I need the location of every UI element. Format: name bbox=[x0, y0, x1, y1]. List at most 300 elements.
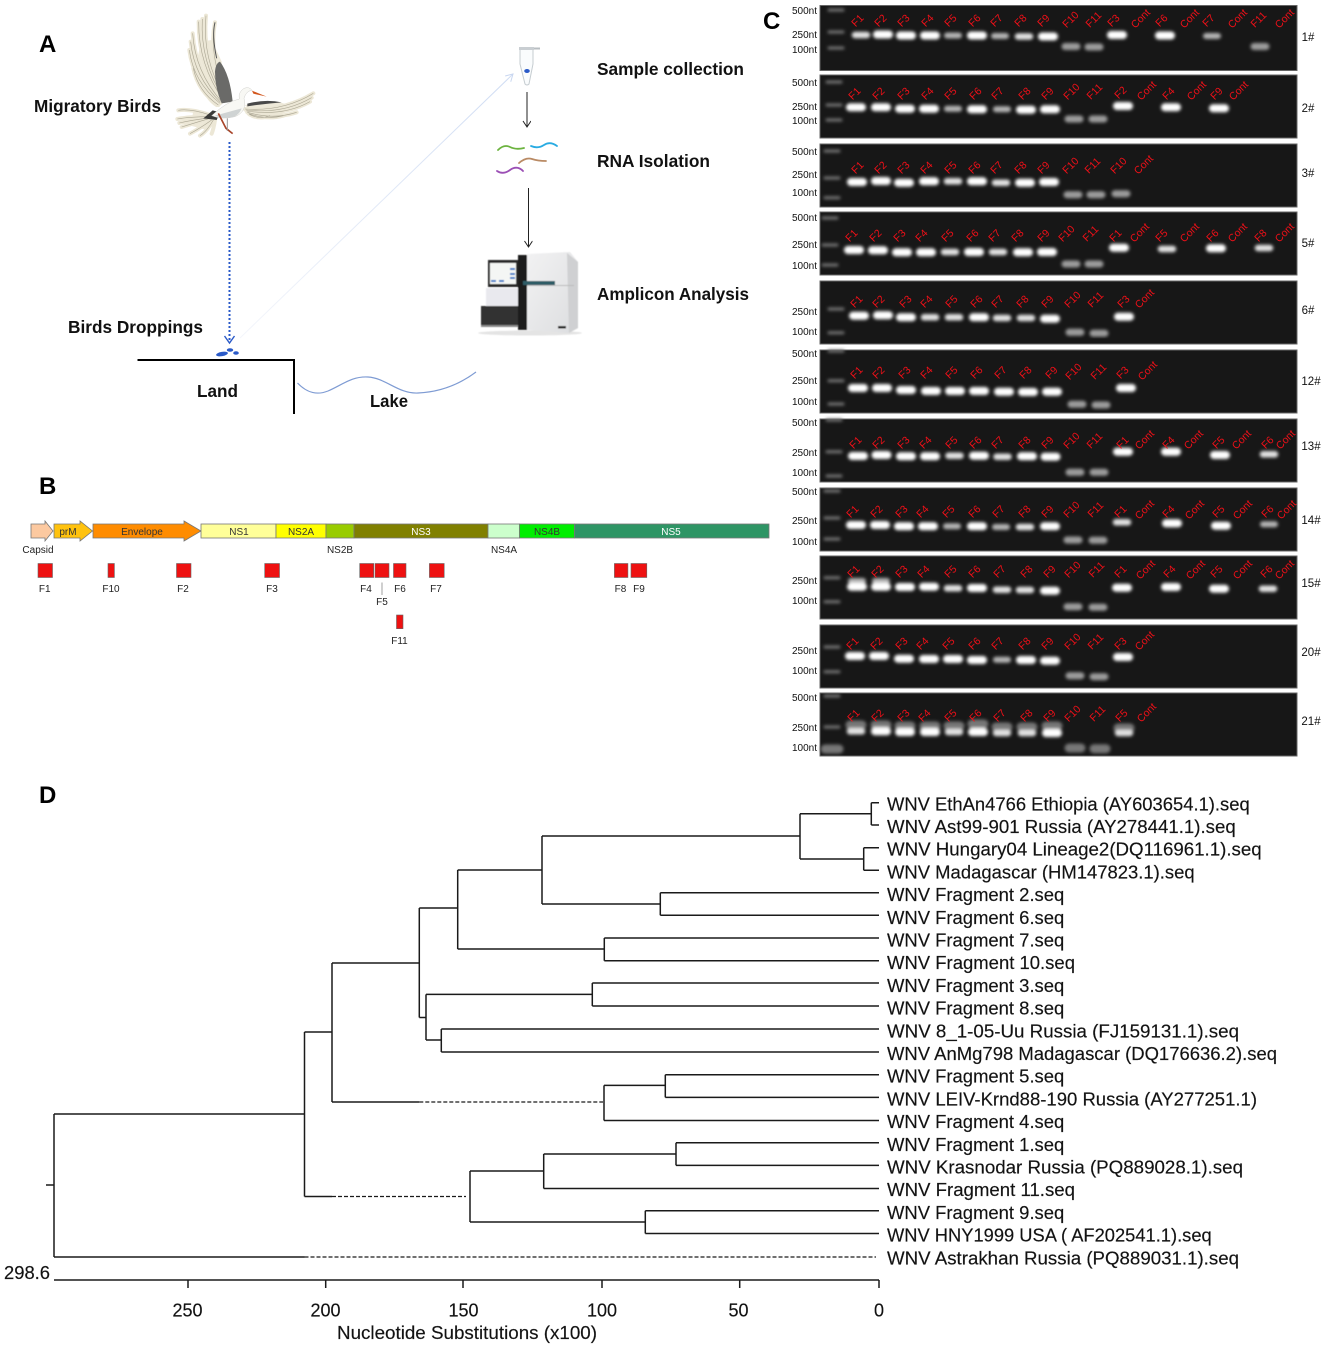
gel 6#: 6# bbox=[1302, 305, 1315, 317]
tip labels: WNV Fragment 5.seq bbox=[887, 1067, 1064, 1087]
gel 3#: F10 bbox=[1060, 155, 1082, 177]
gel 20#: 20# bbox=[1301, 647, 1321, 659]
gel 2#: F2 bbox=[1112, 84, 1130, 101]
gel 5#: F6 bbox=[964, 227, 982, 244]
tip labels: WNV Ast99-901 Russia (AY278441.1).seq bbox=[887, 817, 1236, 837]
tip labels: WNV Fragment 4.seq bbox=[887, 1112, 1064, 1132]
gel 21#: 250nt bbox=[792, 723, 817, 734]
icon: flying bird bbox=[177, 16, 313, 136]
gel 2#: F4 bbox=[919, 85, 937, 102]
gel 3#: F4 bbox=[918, 159, 936, 176]
gel 20#: F1 bbox=[844, 635, 862, 652]
gel 5#: F8 bbox=[1252, 227, 1270, 244]
gel 6#: F1 bbox=[848, 293, 866, 310]
gel 15#: F5 bbox=[1208, 563, 1226, 580]
gel 13#: 100nt bbox=[792, 468, 817, 479]
panel: C gel images bbox=[763, 6, 1321, 756]
gel 1#: F7 bbox=[988, 12, 1006, 29]
gel 14#: 500nt bbox=[792, 487, 817, 498]
gel 3#: 500nt bbox=[792, 147, 817, 158]
gel 6#: F11 bbox=[1086, 289, 1106, 310]
gel 15#: F10 bbox=[1062, 559, 1084, 581]
gel 12#: Cont bbox=[1136, 359, 1160, 383]
gel 5#: 250nt bbox=[792, 240, 817, 251]
gel 12#: 12# bbox=[1301, 376, 1321, 388]
gel 3#: F7 bbox=[988, 159, 1006, 176]
genome bar bbox=[31, 521, 769, 541]
gel 12#: 100nt bbox=[792, 397, 817, 408]
gel 15#: F4 bbox=[1161, 563, 1179, 580]
tip labels: WNV Fragment 6.seq bbox=[887, 908, 1064, 928]
gel 12#: F6 bbox=[968, 364, 986, 381]
gel 13#: 250nt bbox=[792, 448, 817, 459]
gel 15#: F3 bbox=[893, 563, 911, 580]
gel 13#: Cont bbox=[1274, 428, 1298, 452]
gel 21#: F10 bbox=[1062, 703, 1084, 725]
gel 20#: Cont bbox=[1133, 629, 1157, 653]
lake wave bbox=[298, 372, 476, 393]
icon: sample tube bbox=[519, 47, 540, 85]
gel 3#: F2 bbox=[872, 159, 890, 176]
gel 15#: 15# bbox=[1301, 578, 1321, 590]
tip labels: WNV Fragment 7.seq bbox=[887, 930, 1064, 950]
gel 1#: F9 bbox=[1035, 12, 1053, 29]
label: Lake: Lake bbox=[370, 391, 408, 411]
tip labels: WNV EthAn4766 Ethiopia (AY603654.1).seq bbox=[887, 794, 1250, 814]
fragment markers bbox=[38, 564, 647, 629]
gel 1#: 100nt bbox=[792, 45, 817, 56]
gel 15#: F6 bbox=[966, 563, 984, 580]
gel 12#: F7 bbox=[992, 364, 1010, 381]
gel 13#: 500nt bbox=[792, 418, 817, 429]
gel 12#: F2 bbox=[870, 364, 888, 381]
gel 21#: F3 bbox=[895, 707, 913, 724]
label: Migratory Birds: Migratory Birds bbox=[34, 96, 161, 116]
genome labels: NS2B bbox=[327, 545, 353, 556]
axis scale: 150 bbox=[448, 1300, 479, 1320]
label: Land: Land bbox=[197, 381, 238, 401]
genome labels: Capsid bbox=[22, 545, 54, 556]
gel 15#: F7 bbox=[991, 563, 1009, 580]
genome labels: NS5 bbox=[661, 527, 681, 538]
gel 15#: F4 bbox=[915, 563, 933, 580]
gel 5#: F3 bbox=[891, 227, 909, 244]
gel 3# bbox=[792, 144, 1315, 207]
gel 15#: Cont bbox=[1184, 558, 1208, 582]
gel 6#: F6 bbox=[968, 293, 986, 310]
gel 14#: Cont bbox=[1231, 498, 1255, 522]
gel 2#: F7 bbox=[989, 85, 1007, 102]
gel 3#: 250nt bbox=[792, 170, 817, 181]
gel 2#: F2 bbox=[870, 85, 888, 102]
gel 6#: F7 bbox=[989, 293, 1007, 310]
heading: C: C bbox=[763, 8, 780, 35]
gel 3#: F3 bbox=[895, 159, 913, 176]
gel 15#: F8 bbox=[1018, 563, 1036, 580]
gel 13#: F2 bbox=[870, 434, 888, 451]
gel 20#: F10 bbox=[1062, 631, 1084, 653]
gel 14#: 250nt bbox=[792, 516, 817, 527]
gel 3#: F10 bbox=[1108, 155, 1130, 177]
gel 1#: F2 bbox=[872, 12, 890, 29]
gel 6#: Cont bbox=[1133, 287, 1157, 311]
gel 13#: F1 bbox=[1114, 434, 1132, 451]
gel 5#: F10 bbox=[1056, 223, 1078, 245]
axis scale: 0 bbox=[874, 1300, 884, 1320]
gel 14#: 100nt bbox=[792, 537, 817, 548]
gel 1#: F11 bbox=[1249, 9, 1269, 30]
gel 20#: F5 bbox=[940, 635, 958, 652]
gel 13#: F3 bbox=[895, 434, 913, 451]
fragment labels: F3 bbox=[266, 584, 278, 595]
tip labels: WNV Hungary04 Lineage2(DQ116961.1).seq bbox=[887, 840, 1262, 860]
gel 13#: F11 bbox=[1085, 430, 1105, 451]
gel 1#: F3 bbox=[895, 12, 913, 29]
gel 15#: 100nt bbox=[792, 596, 817, 607]
gel 21#: F6 bbox=[967, 707, 985, 724]
gel 12#: F3 bbox=[1114, 364, 1132, 381]
panel: A sampling workflow bbox=[34, 16, 749, 414]
gel 21#: Cont bbox=[1135, 701, 1159, 725]
gel 3#: F9 bbox=[1035, 159, 1053, 176]
gel 2#: Cont bbox=[1227, 79, 1251, 103]
genome labels: NS2A bbox=[288, 527, 314, 538]
gel 14#: F9 bbox=[1039, 503, 1057, 520]
gel 3#: F6 bbox=[966, 159, 984, 176]
gel 2#: F10 bbox=[1061, 81, 1083, 103]
fragment labels bbox=[39, 582, 645, 647]
fragment labels: F11 bbox=[391, 636, 408, 647]
gel 1#: Cont bbox=[1129, 7, 1153, 31]
genome labels bbox=[22, 527, 681, 556]
label: Amplicon Analysis: Amplicon Analysis bbox=[597, 284, 749, 304]
gel 15#: Cont bbox=[1231, 558, 1255, 582]
gel 13#: F6 bbox=[1259, 434, 1277, 451]
heading: A: A bbox=[39, 31, 56, 58]
gel 5#: F8 bbox=[1009, 227, 1027, 244]
gel 6#: F8 bbox=[1014, 293, 1032, 310]
gel 13#: Cont bbox=[1182, 428, 1206, 452]
gel 1#: F6 bbox=[966, 12, 984, 29]
gel 21# bbox=[792, 693, 1321, 756]
tip labels: WNV Astrakhan Russia (PQ889031.1).seq bbox=[887, 1248, 1239, 1268]
genome labels: NS4A bbox=[491, 545, 517, 556]
gel 13#: F10 bbox=[1061, 430, 1083, 452]
tip labels: WNV Fragment 11.seq bbox=[887, 1180, 1075, 1200]
gel 21#: 500nt bbox=[792, 693, 817, 704]
gel 2#: F3 bbox=[895, 85, 913, 102]
gel 14#: F4 bbox=[914, 503, 932, 520]
label: Sample collection: Sample collection bbox=[597, 59, 744, 79]
gel 20#: F6 bbox=[966, 635, 984, 652]
gel 12#: F9 bbox=[1043, 364, 1061, 381]
gel 21#: F5 bbox=[1113, 707, 1131, 724]
gel 5#: F6 bbox=[1204, 227, 1222, 244]
gel 5#: F9 bbox=[1035, 227, 1053, 244]
gel 15#: F2 bbox=[869, 563, 887, 580]
gel 3#: Cont bbox=[1132, 153, 1156, 177]
gel 12#: F4 bbox=[918, 364, 936, 381]
gel 3#: F8 bbox=[1012, 159, 1030, 176]
gel 5#: F5 bbox=[1153, 227, 1171, 244]
gel 2#: F1 bbox=[846, 85, 864, 102]
genome labels: prM bbox=[59, 527, 77, 538]
gel 14#: F2 bbox=[868, 503, 886, 520]
icon: sequencer bbox=[478, 252, 582, 336]
tip labels: WNV Madagascar (HM147823.1).seq bbox=[887, 862, 1195, 882]
gel 20#: F9 bbox=[1039, 635, 1057, 652]
gel 15#: Cont bbox=[1273, 558, 1297, 582]
gel 1#: 500nt bbox=[792, 6, 817, 17]
gel 21#: 21# bbox=[1301, 716, 1321, 728]
gel 13#: F4 bbox=[1160, 434, 1178, 451]
tip labels: WNV Fragment 9.seq bbox=[887, 1203, 1064, 1223]
gel 1#: F5 bbox=[942, 12, 960, 29]
gel 13#: F4 bbox=[917, 434, 935, 451]
gel 5#: 500nt bbox=[792, 213, 817, 224]
gel 1#: F1 bbox=[849, 12, 867, 29]
gel 5#: F1 bbox=[1107, 227, 1125, 244]
gel 2#: Cont bbox=[1135, 79, 1159, 103]
gel 14#: F4 bbox=[1160, 503, 1178, 520]
gel 14#: F5 bbox=[940, 503, 958, 520]
arrow: RNA to sequencer bbox=[528, 188, 530, 247]
gel 21#: F9 bbox=[1041, 707, 1059, 724]
genome labels: NS4B bbox=[534, 527, 560, 538]
gel 2#: 500nt bbox=[792, 78, 817, 89]
arrow: sampling to tube bbox=[240, 74, 513, 338]
gel 13#: F5 bbox=[1210, 434, 1228, 451]
gel 1#: F3 bbox=[1105, 12, 1123, 29]
gel 15#: F11 bbox=[1087, 559, 1107, 580]
gel 3#: F11 bbox=[1083, 155, 1103, 176]
gel 20#: F4 bbox=[914, 635, 932, 652]
gel 15#: F1 bbox=[845, 563, 863, 580]
heading: D: D bbox=[39, 782, 56, 809]
genome labels: NS3 bbox=[411, 527, 431, 538]
fragment labels: F8 bbox=[615, 584, 627, 595]
gel 14#: 14# bbox=[1301, 515, 1321, 527]
gel 5#: Cont bbox=[1226, 221, 1250, 245]
genome labels: NS1 bbox=[229, 527, 249, 538]
icon: droppings bbox=[216, 348, 239, 357]
gel 1#: F8 bbox=[1012, 12, 1030, 29]
gel 15#: F6 bbox=[1258, 563, 1276, 580]
gel 2#: F8 bbox=[1016, 85, 1034, 102]
gel 15#: F5 bbox=[942, 563, 960, 580]
gel 14#: F3 bbox=[893, 503, 911, 520]
tip labels bbox=[887, 794, 1277, 1268]
gel 13#: F7 bbox=[989, 434, 1007, 451]
gel 20# bbox=[792, 625, 1321, 688]
gel 5# bbox=[792, 212, 1315, 275]
gel 1#: F11 bbox=[1084, 9, 1104, 30]
gel 21#: 100nt bbox=[792, 743, 817, 754]
gel 21#: F8 bbox=[1018, 707, 1036, 724]
gel 14#: F10 bbox=[1061, 499, 1083, 521]
icon: RNA strands bbox=[497, 143, 557, 173]
gel 5#: F5 bbox=[939, 227, 957, 244]
tip labels: WNV HNY1999 USA ( AF202541.1).seq bbox=[887, 1226, 1212, 1246]
fragment labels: F9 bbox=[633, 584, 645, 595]
gel 13#: Cont bbox=[1133, 428, 1157, 452]
axis scale: 298.6 bbox=[4, 1263, 50, 1283]
gel 15#: Cont bbox=[1134, 558, 1158, 582]
gel 1#: F7 bbox=[1200, 12, 1218, 29]
arrow: droppings falling bbox=[228, 142, 230, 343]
gel 20#: F11 bbox=[1086, 631, 1106, 652]
gel 21#: F5 bbox=[942, 707, 960, 724]
gel 6#: F5 bbox=[943, 293, 961, 310]
axis scale: 200 bbox=[310, 1300, 341, 1320]
gel 14#: Cont bbox=[1133, 498, 1157, 522]
gel 14#: F1 bbox=[1112, 503, 1130, 520]
fragment labels: F6 bbox=[394, 584, 406, 595]
gel 14#: F11 bbox=[1086, 499, 1106, 520]
gel 13#: F5 bbox=[943, 434, 961, 451]
gel 5#: Cont bbox=[1128, 221, 1152, 245]
axis scale: Nucleotide Substitutions (x100) bbox=[337, 1323, 597, 1343]
genome labels: Envelope bbox=[121, 527, 163, 538]
gel 12#: 250nt bbox=[792, 376, 817, 387]
gel 13#: F9 bbox=[1039, 434, 1057, 451]
gel 14#: F6 bbox=[966, 503, 984, 520]
gel 14#: F7 bbox=[990, 503, 1008, 520]
gel 12#: F5 bbox=[943, 364, 961, 381]
gel 12#: F10 bbox=[1063, 361, 1085, 383]
gel 2#: Cont bbox=[1185, 79, 1209, 103]
arrow: tube to RNA bbox=[526, 92, 528, 127]
tip labels: WNV Fragment 2.seq bbox=[887, 885, 1064, 905]
gel 3#: 100nt bbox=[792, 188, 817, 199]
gel 14#: F6 bbox=[1259, 503, 1277, 520]
tip labels: WNV Fragment 1.seq bbox=[887, 1135, 1064, 1155]
gel 12#: 500nt bbox=[792, 349, 817, 360]
gel 6#: F3 bbox=[1115, 293, 1133, 310]
axis scale bbox=[4, 1263, 884, 1343]
gel 6#: F4 bbox=[918, 293, 936, 310]
gel 2#: 100nt bbox=[792, 116, 817, 127]
gel 13#: F6 bbox=[967, 434, 985, 451]
gel 14#: F1 bbox=[844, 503, 862, 520]
gel 12#: F3 bbox=[896, 364, 914, 381]
gel 2#: 250nt bbox=[792, 102, 817, 113]
gel 3#: 3# bbox=[1302, 168, 1315, 180]
gel 20#: 250nt bbox=[792, 646, 817, 657]
gel 1#: F6 bbox=[1153, 12, 1171, 29]
gel 2#: F5 bbox=[942, 85, 960, 102]
gel 14#: F8 bbox=[1016, 503, 1034, 520]
tip labels: WNV 8_1-05-Uu Russia (FJ159131.1).seq bbox=[887, 1021, 1239, 1042]
panel: D phylogenetic tree bbox=[4, 782, 1277, 1343]
gel 6#: F10 bbox=[1062, 289, 1084, 311]
tree branches bbox=[46, 803, 879, 1257]
label: RNA Isolation: RNA Isolation bbox=[597, 151, 710, 171]
tip labels: WNV Krasnodar Russia (PQ889028.1).seq bbox=[887, 1158, 1243, 1178]
gel 5#: 100nt bbox=[792, 261, 817, 272]
tip labels: WNV Fragment 8.seq bbox=[887, 999, 1064, 1019]
gel 15#: 250nt bbox=[792, 576, 817, 587]
gel 5#: Cont bbox=[1273, 221, 1297, 245]
tip labels: WNV Fragment 3.seq bbox=[887, 976, 1064, 996]
gel 6#: F9 bbox=[1039, 293, 1057, 310]
gel 13#: F1 bbox=[847, 434, 865, 451]
tip labels: WNV Fragment 10.seq bbox=[887, 953, 1075, 973]
fragment labels: F1 bbox=[39, 584, 51, 595]
gel 6#: F3 bbox=[897, 293, 915, 310]
gel 6#: 100nt bbox=[792, 327, 817, 338]
gel 6#: 250nt bbox=[792, 307, 817, 318]
fragment labels: F4 bbox=[360, 584, 372, 595]
gel 1#: 250nt bbox=[792, 30, 817, 41]
gel 5#: Cont bbox=[1178, 221, 1202, 245]
gel 14#: F5 bbox=[1210, 503, 1228, 520]
axis scale: 100 bbox=[587, 1300, 617, 1320]
heading: B: B bbox=[39, 473, 56, 500]
gel 5#: 5# bbox=[1302, 238, 1315, 250]
tip labels: WNV AnMg798 Madagascar (DQ176636.2).seq bbox=[887, 1044, 1277, 1064]
gel 12#: F11 bbox=[1089, 361, 1109, 382]
gel 20#: F3 bbox=[1112, 635, 1130, 652]
gel 6# bbox=[792, 281, 1315, 344]
gel 12#: F1 bbox=[848, 364, 866, 381]
gel 5#: F11 bbox=[1081, 223, 1101, 244]
gel 2#: F9 bbox=[1208, 85, 1226, 102]
gel 21#: F1 bbox=[845, 707, 863, 724]
gel 5#: F1 bbox=[843, 227, 861, 244]
gel 1#: F10 bbox=[1060, 9, 1082, 31]
gel 21#: F11 bbox=[1088, 703, 1108, 724]
gel 20#: 100nt bbox=[792, 666, 817, 677]
gel 20#: F3 bbox=[893, 635, 911, 652]
gel 2# bbox=[792, 75, 1315, 138]
label: Birds Droppings: Birds Droppings bbox=[68, 317, 203, 337]
panel: B genome map bbox=[22, 473, 769, 647]
gel 13#: 13# bbox=[1301, 441, 1321, 453]
gel 1#: F4 bbox=[919, 12, 937, 29]
gel 13# bbox=[792, 418, 1321, 482]
gel 14# bbox=[792, 487, 1321, 551]
gel 2#: F11 bbox=[1085, 81, 1105, 102]
gel 2#: F6 bbox=[967, 85, 985, 102]
gel 21#: F2 bbox=[869, 707, 887, 724]
tip labels: WNV LEIV-Krnd88-190 Russia (AY277251.1) bbox=[887, 1089, 1257, 1109]
fragment labels: F10 bbox=[102, 584, 120, 595]
axis scale: 250 bbox=[172, 1300, 203, 1320]
axis scale: 50 bbox=[728, 1300, 749, 1320]
gel 15#: F1 bbox=[1112, 563, 1130, 580]
gel 14#: Cont bbox=[1275, 498, 1299, 522]
gel 20#: F2 bbox=[868, 635, 886, 652]
gel 15#: F9 bbox=[1041, 563, 1059, 580]
gel 3#: F5 bbox=[942, 159, 960, 176]
gel 14#: Cont bbox=[1183, 498, 1207, 522]
gel 1# bbox=[792, 6, 1315, 70]
gel 2#: F9 bbox=[1039, 85, 1057, 102]
gel 1#: Cont bbox=[1226, 7, 1250, 31]
gel 20#: F8 bbox=[1016, 635, 1034, 652]
gel 6#: F2 bbox=[870, 293, 888, 310]
gel 5#: F2 bbox=[867, 227, 885, 244]
gel 12#: F8 bbox=[1017, 364, 1035, 381]
gel 1#: Cont bbox=[1273, 7, 1297, 31]
gel 3#: F1 bbox=[849, 159, 867, 176]
fragment labels: F7 bbox=[430, 584, 442, 595]
gel 21#: F4 bbox=[916, 707, 934, 724]
gel 13#: F8 bbox=[1016, 434, 1034, 451]
gel 5#: F7 bbox=[986, 227, 1004, 244]
fragment labels: F5 bbox=[376, 597, 388, 608]
